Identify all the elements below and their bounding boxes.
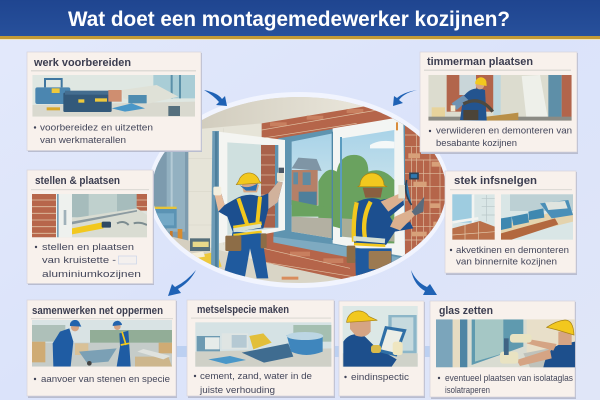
image: materials and tubs <box>195 322 331 367</box>
arrow: bottom left <box>168 270 196 296</box>
bullet text: van werkmaterallen <box>40 135 126 145</box>
heading: timmerman plaatsen <box>427 56 533 68</box>
bullet text: eventueel plaatsen van isolataglas <box>445 373 573 383</box>
panel: stek infsnelgen <box>445 171 577 275</box>
heading: glas zetten <box>439 305 493 317</box>
image: toolboxes <box>32 75 195 117</box>
image: inspector with tablet <box>343 306 418 367</box>
bullet text <box>35 242 141 279</box>
bullet text: besabante kozijnen <box>436 138 517 148</box>
window outer frame <box>273 117 405 267</box>
sill <box>273 236 400 264</box>
bullet text <box>194 371 312 395</box>
bullet text: aluminiumkozijnen <box>42 269 141 279</box>
heading: werk voorbereiden <box>33 57 131 69</box>
arrow: top right <box>393 90 417 106</box>
floor items <box>172 236 224 270</box>
left door <box>154 152 188 240</box>
bullet text: akvetkinen en demonteren <box>456 245 569 255</box>
ceiling <box>202 97 362 120</box>
arrow: top left <box>204 90 227 106</box>
image: door frame with yellow strip <box>32 194 147 237</box>
panel: eindinspectie <box>339 301 425 398</box>
bullet text: voorbereidez en uitzetten <box>40 122 153 132</box>
trees <box>318 155 394 243</box>
brick wall <box>262 100 450 282</box>
connecting band behind bottom panels <box>170 346 450 357</box>
image: worker fitting glass <box>436 319 575 367</box>
back wall <box>188 123 262 262</box>
header banner <box>0 0 600 40</box>
heading: samenwerken net oppermen <box>32 305 163 317</box>
title: Wat doet een montagemedewerker kozijnen? <box>68 7 510 31</box>
bullet text <box>438 373 573 395</box>
heading: metselspecie maken <box>197 304 289 316</box>
window opening and view <box>292 133 333 238</box>
bullet text: stellen en plaatsen <box>42 242 134 252</box>
bullet text <box>34 122 153 145</box>
left worker <box>213 168 284 278</box>
distant house <box>292 158 322 171</box>
panel: samenwerken net oppermen <box>27 300 177 398</box>
left cabinet <box>152 208 177 228</box>
open sash <box>218 132 285 243</box>
panel: metselspecie maken <box>187 300 335 398</box>
heading: stek infsnelgen <box>454 175 537 187</box>
bullet text: juiste verhouding <box>199 385 275 395</box>
bullet text <box>429 126 572 148</box>
bullet text: verwiideren en demonteren van <box>436 126 572 136</box>
right worker <box>347 173 424 282</box>
panel: glas zetten <box>430 301 576 399</box>
image: carpenter removing frame <box>428 75 572 121</box>
bullet text: cement, zand, water in de <box>200 371 312 381</box>
central scene: two installers fitting a window <box>148 85 450 295</box>
panel: timmerman plaatsen <box>420 52 578 154</box>
image: window sill with bricks <box>452 194 573 240</box>
image: two workers with wheelbarrow <box>32 320 172 367</box>
bullet text <box>450 245 569 266</box>
bullet text: isolatraperen <box>445 385 490 395</box>
heading: stellen & plaatsen <box>35 175 120 187</box>
bullet text: van kruistette - <box>42 255 116 265</box>
bullet text: eindinspectic <box>351 372 409 382</box>
panel: werk voorbereiden <box>27 52 202 152</box>
panel: stellen & plaatsen <box>27 170 154 285</box>
bullet text: aanvoer van stenen en specie <box>41 374 170 384</box>
bullet text: van binnernite kozijnen <box>456 256 557 266</box>
arrow: bottom right <box>411 270 437 295</box>
